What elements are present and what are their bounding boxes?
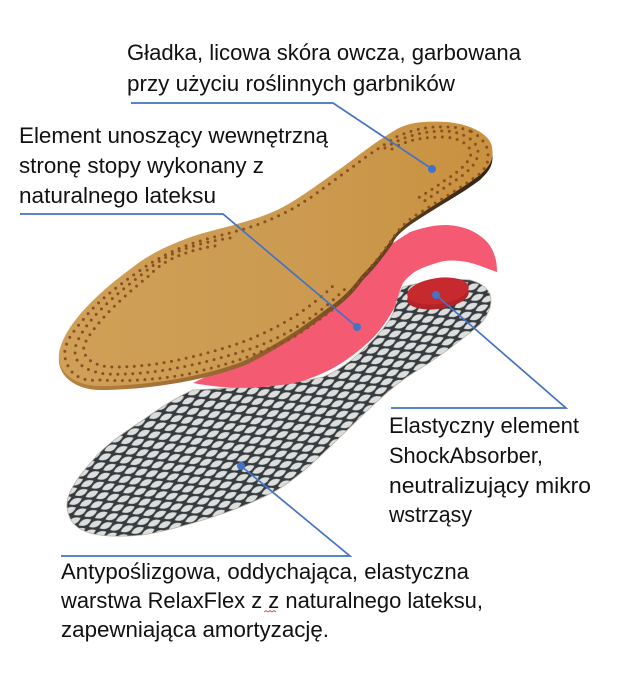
text: latex arch element description: stronę stopy wykonany z — [19, 153, 264, 178]
text: latex arch element description — [19, 123, 329, 208]
layer: leather top insole — [59, 122, 493, 390]
layer: red shock absorber disc — [405, 274, 471, 313]
text: sheepskin leather description: Gładka, licowa skóra owcza, garbowana — [127, 40, 522, 65]
text: RelaxFlex layer description: warstwa RelaxFlex z z naturalnego lateksu, — [60, 588, 483, 613]
text: RelaxFlex layer description: Antypoślizgowa, oddychająca, elastyczna — [61, 559, 470, 584]
text: latex arch element description: Element unoszący wewnętrzną — [19, 123, 329, 148]
leader line: mesh layer — [61, 462, 350, 556]
perforation dots — [65, 127, 488, 381]
text: sheepskin leather description: przy użyciu roślinnych garbników — [127, 71, 455, 96]
leader line: shock absorber — [391, 291, 566, 408]
text: ShockAbsorber description — [388, 413, 591, 527]
text: ShockAbsorber description: Elastyczny element — [389, 413, 579, 438]
text: RelaxFlex layer description: zapewniająca amortyzację. — [61, 617, 329, 642]
text: ShockAbsorber description: wstrząsy — [388, 502, 472, 527]
leader line: leather to heading text — [131, 103, 436, 173]
text: ShockAbsorber description: ShockAbsorber, — [389, 443, 543, 468]
text: sheepskin leather description — [127, 40, 522, 96]
text: latex arch element description: naturalnego lateksu — [19, 183, 216, 208]
layer: pink latex arch support — [193, 225, 497, 388]
spellcheck squiggle — [264, 610, 276, 612]
text: RelaxFlex layer description — [60, 559, 483, 642]
layer: anti-slip mesh sole — [67, 279, 491, 536]
leader line: latex arch element — [20, 214, 361, 331]
text: ShockAbsorber description: neutralizujący mikro — [389, 473, 591, 498]
